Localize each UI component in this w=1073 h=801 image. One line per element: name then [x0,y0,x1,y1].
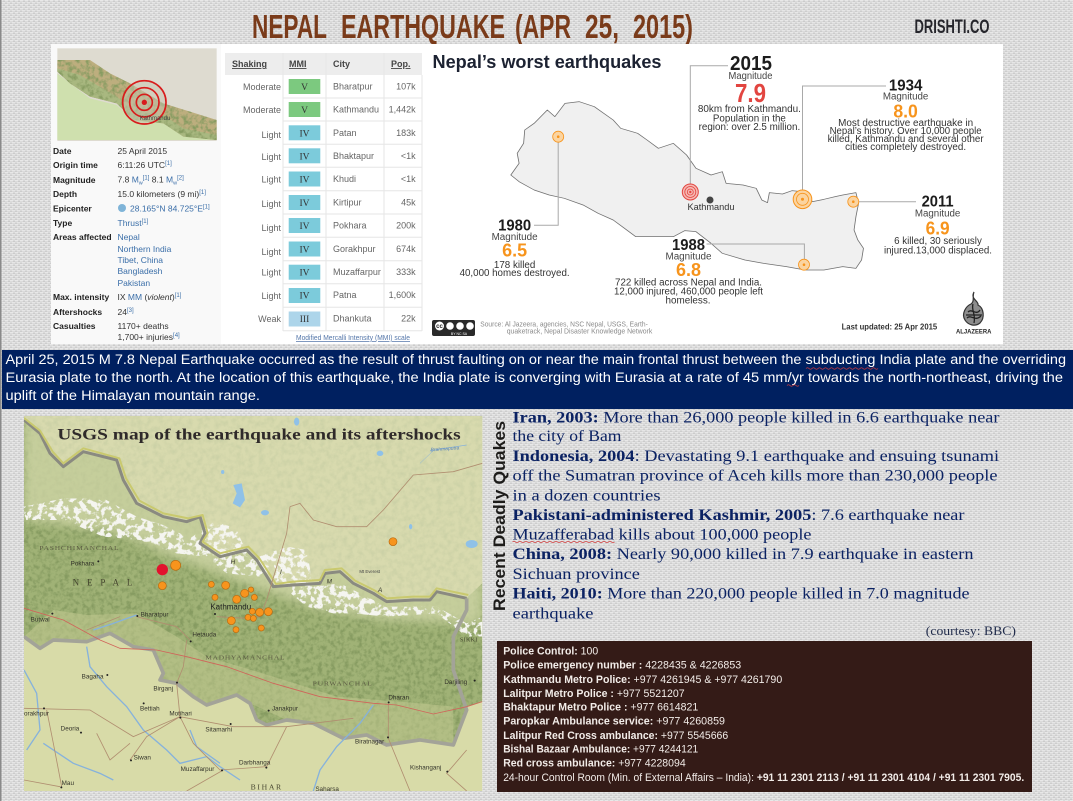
table rows: III [300,315,309,325]
source note: Source: Al Jazeera, agencies, NSC Nepal, USGS, Earth- [480,320,648,329]
callout: 1980: 40,000 homes destroyed. [460,268,570,279]
infobox rows: 28.165°N 84.725°E [130,204,203,214]
infobox rows: 8.1 [149,174,166,184]
infobox rows: 25 April 2015 [118,146,167,156]
callout: 2015: Magnitude [728,71,773,82]
text block: recent deadly quakes list: Iran, 2003: More than 26,000 people killed in 6.6 earthquake near [512,409,1000,426]
map: epicentre locator: Kathmandu [140,116,170,122]
callout: 1980 [460,218,570,279]
infobox rows: [1] [175,293,182,299]
panel: emergency contacts: Bishal Bazaar Ambulance: +977 4244121 [503,744,698,756]
place labels: Saharsa [315,786,339,793]
table header: Shaking [232,59,267,69]
table rows: 1,442k [389,104,416,114]
callout: 1988: 1988 [672,237,705,254]
infobox rows: [1] [203,204,210,210]
infobox rows: Pakistan [118,278,150,288]
panel: emergency contacts: Red cross ambulance: +977 4228094 [503,758,686,770]
callout: 2011: 6.9 [926,217,950,238]
table rows [243,79,416,326]
callout: 2015: 7.9 [735,78,766,108]
callout: 2015: 80km from Kathmandu. [698,104,801,115]
table rows: IV [299,268,310,278]
icon: creative commons badge: BY NC SA [451,332,468,336]
table rows: Patna [333,290,357,300]
credit: courtesy BBC: (courtesy: BBC) [926,624,1016,638]
callout: 1934: killed, Kathmandu and several other [828,134,984,145]
place labels: PURWANCHAL [313,681,373,688]
last updated note: Last updated: 25 Apr 2015 [842,321,937,331]
infobox rows: Origin time [53,160,98,170]
table rows: IV [299,152,310,162]
callout: 1934: 1934 [889,78,923,95]
aftershock markers [158,538,397,633]
place labels: Bettiah [140,705,160,712]
panel: shaking intensity table [225,53,422,342]
table rows: <1k [401,151,416,161]
infobox rows: w [172,180,177,186]
map: epicentre locator [57,48,217,141]
table rows: Light [261,247,281,257]
table rows: Muzaffarpur [333,267,381,277]
infobox rows: Nepal [118,232,140,242]
brand label: DRISHTI.CO [914,17,990,38]
connector lines [534,66,916,260]
table header: City [333,59,350,69]
panel: earthquake infobox [51,44,221,344]
table rows: Light [261,152,281,162]
infobox rows [53,146,210,342]
table rows: 674k [396,244,416,254]
infobox rows: Epicenter [53,204,92,214]
table rows: IV [299,246,310,256]
table footnote link: Modified Mercalli Intensity (MMI) scale [296,333,410,342]
icon: creative commons badge [432,320,475,336]
panel: emergency contacts: Bhaktapur Metro Police : +977 6614821 [503,702,698,714]
infobox rows: [1] [142,219,149,225]
infobox rows: [4] [173,333,180,339]
callout: 2011: Magnitude [915,209,961,220]
callout: 2015: region: over 2.5 million. [699,122,800,133]
table rows: 107k [396,82,416,92]
place labels: Darbhanga [239,759,271,766]
infobox rows: [3] [127,308,134,314]
infobox rows: 15.0 kilometers (9 mi) [118,189,199,199]
place labels: Butwal [31,616,50,623]
icon: Al Jazeera logo: ALJAZEERA [956,328,992,335]
table rows: Weak [258,314,281,324]
infobox rows: Thrust [118,218,142,228]
table rows: Dhankuta [333,314,372,324]
map title: USGS map of the earthquake and its aftershocks [57,426,461,443]
infobox rows: Northern India [118,244,172,254]
title: (APR [515,8,571,45]
title [252,8,693,45]
table rows: Patan [333,128,357,138]
title: 2015) [633,8,693,45]
text block: recent deadly quakes list: Sichuan province [512,566,640,583]
place labels: Janakpur [272,706,298,713]
place labels: orakhpur [24,711,49,718]
table header [225,53,422,75]
place labels: Brahmaputra [430,445,460,453]
infobox rows: 1,700+ injuries [118,332,173,342]
icon: Al Jazeera logo [956,292,992,335]
table rows: Moderate [243,82,281,92]
panel: emergency contacts: 24-hour Control Room (Min. of External Affairs – India): +91 11 2301 2113 / +91 11 2301 4104 / +91 11 2301 7905. [503,772,1024,784]
place labels: M [327,578,333,585]
callout: 1980: 6.5 [502,240,527,261]
infobox rows: [1] [165,161,172,167]
table rows: Bhaktapur [333,151,374,161]
place labels: Mt Everest [359,569,381,574]
highway [24,608,482,714]
table rows: 200k [396,220,416,230]
table rows: 22k [401,314,416,324]
table rows: IV [299,130,310,140]
panel: emergency contacts: Lalitpur Metro Police : +977 5521207 [503,688,685,700]
table rows: Light [261,268,281,278]
source note: quaketrack, Nepal Disaster Knowledge Network [507,326,653,335]
infobox rows: M [166,174,173,184]
table rows: 1,600k [389,290,416,300]
panel: navy explanation banner: Eurasia plate to the north. At the location of this earthquake, the India plate is converging with Eurasia at a rate of 45 mm/yr towards the north-northeast, driving the [6,370,1063,385]
infobox rows: [1] [199,190,206,196]
callout: 1988 [614,237,763,306]
panel: emergency contacts [497,641,1032,792]
place labels: A [377,587,382,594]
infobox rows: IX MM (violent) [118,292,175,302]
snow peaks [24,493,482,643]
panel: emergency contacts: Paropkar Ambulance service: +977 4260859 [503,716,725,728]
callout: 1934: cities completely destroyed. [845,142,966,153]
table rows: IV [299,292,310,302]
rivers and lakes [24,445,467,791]
Kathmandu marker: Kathmandu [688,202,734,213]
place labels: MADHYAMANCHAL [205,654,285,661]
table rows: <1k [401,174,416,184]
place labels: Sitamarhi [205,726,232,733]
infobox rows: 24 [118,307,127,317]
place labels: Biratnagar [355,739,384,746]
title: NEPAL [252,8,327,45]
callout: 1988: 12,000 injured, 460,000 people left [614,287,763,298]
panel: white summary panel [51,44,1003,344]
epicentre markers [553,131,859,270]
place labels: Kathmandu [210,603,251,612]
infobox rows: Bangladesh [118,266,163,276]
place labels: Hetauda [192,631,217,638]
place labels: BIHAR [251,782,283,791]
infobox rows: Casualties [53,321,96,331]
table rows: 183k [396,128,416,138]
panel: navy explanation banner: uplift of the Himalayan mountain range. [6,388,260,403]
callout: 2011: injured.13,000 displaced. [884,245,992,256]
place labels: Dharan [388,695,410,702]
callout: 1934: Most destructive earthquake in [838,118,973,129]
table rows: Light [261,291,281,301]
callout: 2015: Population in the [713,113,786,124]
table rows: Bharatpur [333,82,373,92]
callout: 1988: 6.8 [676,259,701,280]
callout: 2011: 6 killed, 30 seriously [894,236,982,247]
table rows: 45k [401,198,416,208]
text block: recent deadly quakes list: Haiti, 2010: More than 220,000 people killed in 7.0 magnitude [512,585,970,602]
place labels: PASHCHIMANCHAL [39,545,119,552]
panel: emergency contacts: Lalitpur Red Cross ambulance: +977 5545666 [503,730,728,742]
infobox rows: w [138,180,143,186]
regional roads [24,463,482,791]
callout: 1988: homeless. [666,295,710,306]
callout: 1980: 1980 [498,218,531,235]
table rows: IV [299,199,310,209]
infobox rows: Date [53,146,72,156]
panel: emergency contacts: Kathmandu Metro Police: +977 4261945 & +977 4261790 [503,674,782,686]
text block: recent deadly quakes list: Pakistani-administered Kashmir, 2005 : 7.6 earthquake near [512,507,965,524]
place labels: Muzaffarpur [181,766,214,773]
table rows: Khudi [333,174,356,184]
text block: recent deadly quakes list: earthquake [512,605,594,622]
table rows: V [301,83,308,93]
panel: navy explanation banner [2,350,1073,409]
infobox rows: [1] [143,176,150,182]
panel: Nepal's worst earthquakes [432,52,992,336]
table header: Pop. [391,59,410,69]
vertical heading: Recent Deadly Quakes: Recent Deadly Quakes [490,421,509,611]
place labels: Kishanganj [410,764,441,771]
table rows: IV [299,222,310,232]
text block: recent deadly quakes list: China, 2008: Nearly 90,000 killed in 7.9 earthquake in eastern [512,546,974,563]
callout: 1988: 722 killed across Nepal and India. [615,277,762,288]
table rows: Kirtipur [333,198,362,208]
infobox rows: Aftershocks [53,307,102,317]
callout: 1934: 8.0 [893,100,918,121]
infobox rows: Magnitude [53,175,96,185]
central hills [24,416,482,749]
panel: navy explanation banner: April 25, 2015 M 7.8 Nepal Earthquake occurred as the result of thrust faulting on or near the main frontal thrust between the subducting India plate and the overriding [6,352,1066,367]
callout: 2011: 2011 [922,194,954,211]
place labels: H [231,559,236,566]
title: 25, [585,8,619,45]
place labels [24,445,478,793]
callout: 2011 [884,194,992,256]
callout: 1980: 178 killed [494,260,535,271]
infobox rows: Areas affected [53,232,112,242]
map: USGS earthquake and aftershocks [24,416,482,793]
table header: MMI [289,59,306,69]
northern plateau [482,416,483,583]
text block: recent deadly quakes list: the city of Bam [512,428,622,445]
callout: 1988: Magnitude [666,251,712,262]
place labels: Birganj [153,685,173,692]
place labels: Motihari [169,710,192,717]
text block: recent deadly quakes list: off the Sumatran province of Aceh kills more than 230,000 people [512,467,998,484]
place labels: Darjiling [444,679,468,686]
infobox rows: 1170+ deaths [118,321,169,331]
table rows: 333k [396,267,416,277]
international borders [24,420,467,602]
infobox rows: [2] [177,176,184,182]
heading: Nepal’s worst earthquakes [432,52,662,72]
callout: 1980: Magnitude [492,232,538,243]
main shock marker [157,564,168,575]
infobox rows: 7.8 M [118,174,139,184]
place labels: I [280,569,282,576]
infobox rows: Depth [53,189,77,199]
infobox rows: Type [53,218,72,228]
place labels: SIKKI [460,638,478,644]
panel: emergency contacts: Police emergency number : 4228435 & 4226853 [503,660,741,672]
place labels: Deoria [61,725,80,732]
icon: creative commons badge: cc [436,324,443,330]
Kathmandu marker [688,196,734,213]
text block: recent deadly quakes list: Muzafferabad kills about 100,000 people [512,526,812,543]
callout: 2015: 2015 [730,53,772,75]
place labels: Pokhara [71,560,95,567]
table rows: V [301,106,308,116]
place labels: NEPAL [73,577,136,587]
table rows: Pokhara [333,220,367,230]
Nepal outline map [511,102,863,270]
place labels: Mau [62,780,74,787]
callout: 1934: Nepal’s history. Over 10,000 people [830,126,982,137]
place labels: Bagaha [82,674,104,681]
table rows: Moderate [243,105,281,115]
text block: recent deadly quakes list: in a dozen countries [512,487,660,504]
table rows: IV [299,176,310,186]
table rows: Light [261,223,281,233]
table rows: Light [261,130,281,140]
place labels: Siwan [134,755,151,762]
place labels: Bharatpur [141,612,168,619]
table rows: Kathmandu [333,104,379,114]
infobox rows: 6:11:26 UTC [118,160,165,170]
table rows: Gorakhpur [333,244,376,254]
table rows: Light [261,174,281,184]
source note [480,320,653,335]
text block: recent deadly quakes list [512,409,1000,622]
callout: 2015 [698,53,801,133]
callout: 1934 [828,78,984,153]
callout: 1934: Magnitude [883,91,929,102]
panel: emergency contacts: Police Control: 100 [503,646,598,658]
infobox rows: Max. intensity [53,292,109,302]
title: EARTHQUAKE [341,8,505,45]
table rows: Light [261,199,281,209]
infobox rows: Tibet, China [118,255,163,265]
text block: recent deadly quakes list: Indonesia, 2004 : Devastating 9.1 earthquake and ensuing tsunami [512,448,1000,465]
